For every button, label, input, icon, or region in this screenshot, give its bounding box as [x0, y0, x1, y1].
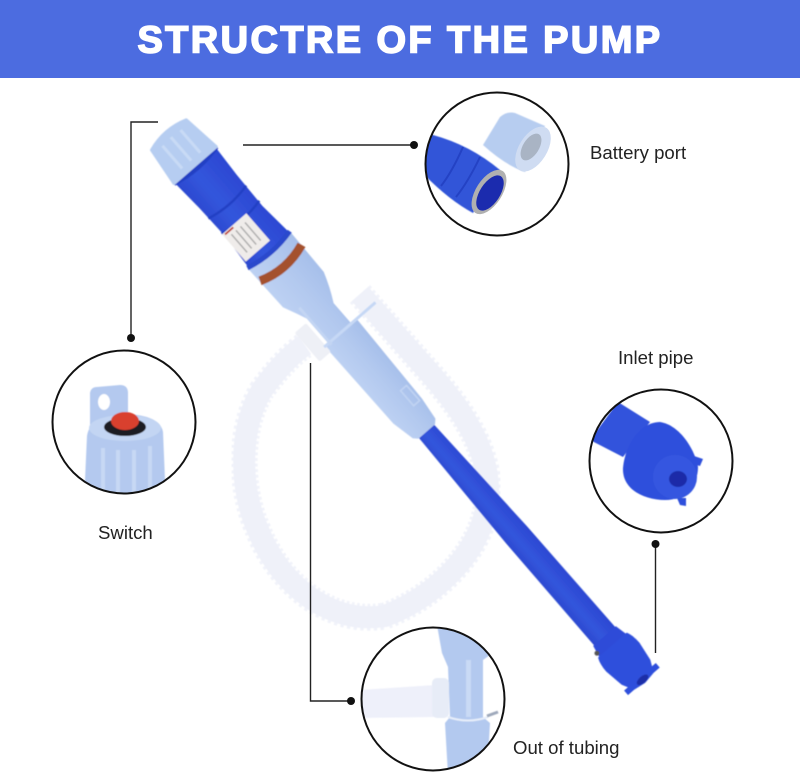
icon: switch cap: [90, 385, 128, 425]
copper band: [260, 245, 305, 285]
leader line: inlet pipe: [652, 540, 660, 653]
label: battery port: Battery port: [590, 142, 687, 163]
icon: opened barrel: [426, 134, 500, 214]
inlet tip: [588, 622, 662, 697]
flexible outlet hose: [244, 294, 488, 617]
neck and motor collar: [249, 233, 364, 353]
icon: red button: [104, 418, 146, 436]
leader line: out of tubing: [310, 363, 355, 705]
label: out of tubing: Out of tubing: [513, 737, 619, 758]
callout: inlet pipe: [590, 390, 732, 532]
callout: battery port: [415, 92, 568, 236]
callout: switch: [52, 350, 196, 500]
warning label: [222, 213, 270, 261]
icon: barrel and outlet: [437, 625, 490, 774]
label: switch: Switch: [98, 522, 153, 543]
header band: [0, 0, 800, 78]
blue inlet tube: [414, 419, 619, 650]
leader line: battery port: [243, 141, 418, 149]
pump body: [140, 102, 680, 706]
icon: inlet tip: [590, 402, 650, 457]
callout: out of tubing: [360, 625, 504, 774]
pump lower barrel: [325, 319, 443, 445]
top cap: [145, 114, 216, 183]
leader line: switch: [127, 122, 158, 342]
icon: hose: [360, 685, 435, 718]
label: inlet pipe: Inlet pipe: [618, 347, 693, 368]
title: STRUCTRE OF THE PUMP: [137, 20, 663, 62]
collar ring and fins: [324, 302, 375, 347]
icon: removed cap: [483, 112, 545, 172]
outlet connector clamp: [295, 323, 331, 362]
battery barrel: [176, 149, 290, 269]
